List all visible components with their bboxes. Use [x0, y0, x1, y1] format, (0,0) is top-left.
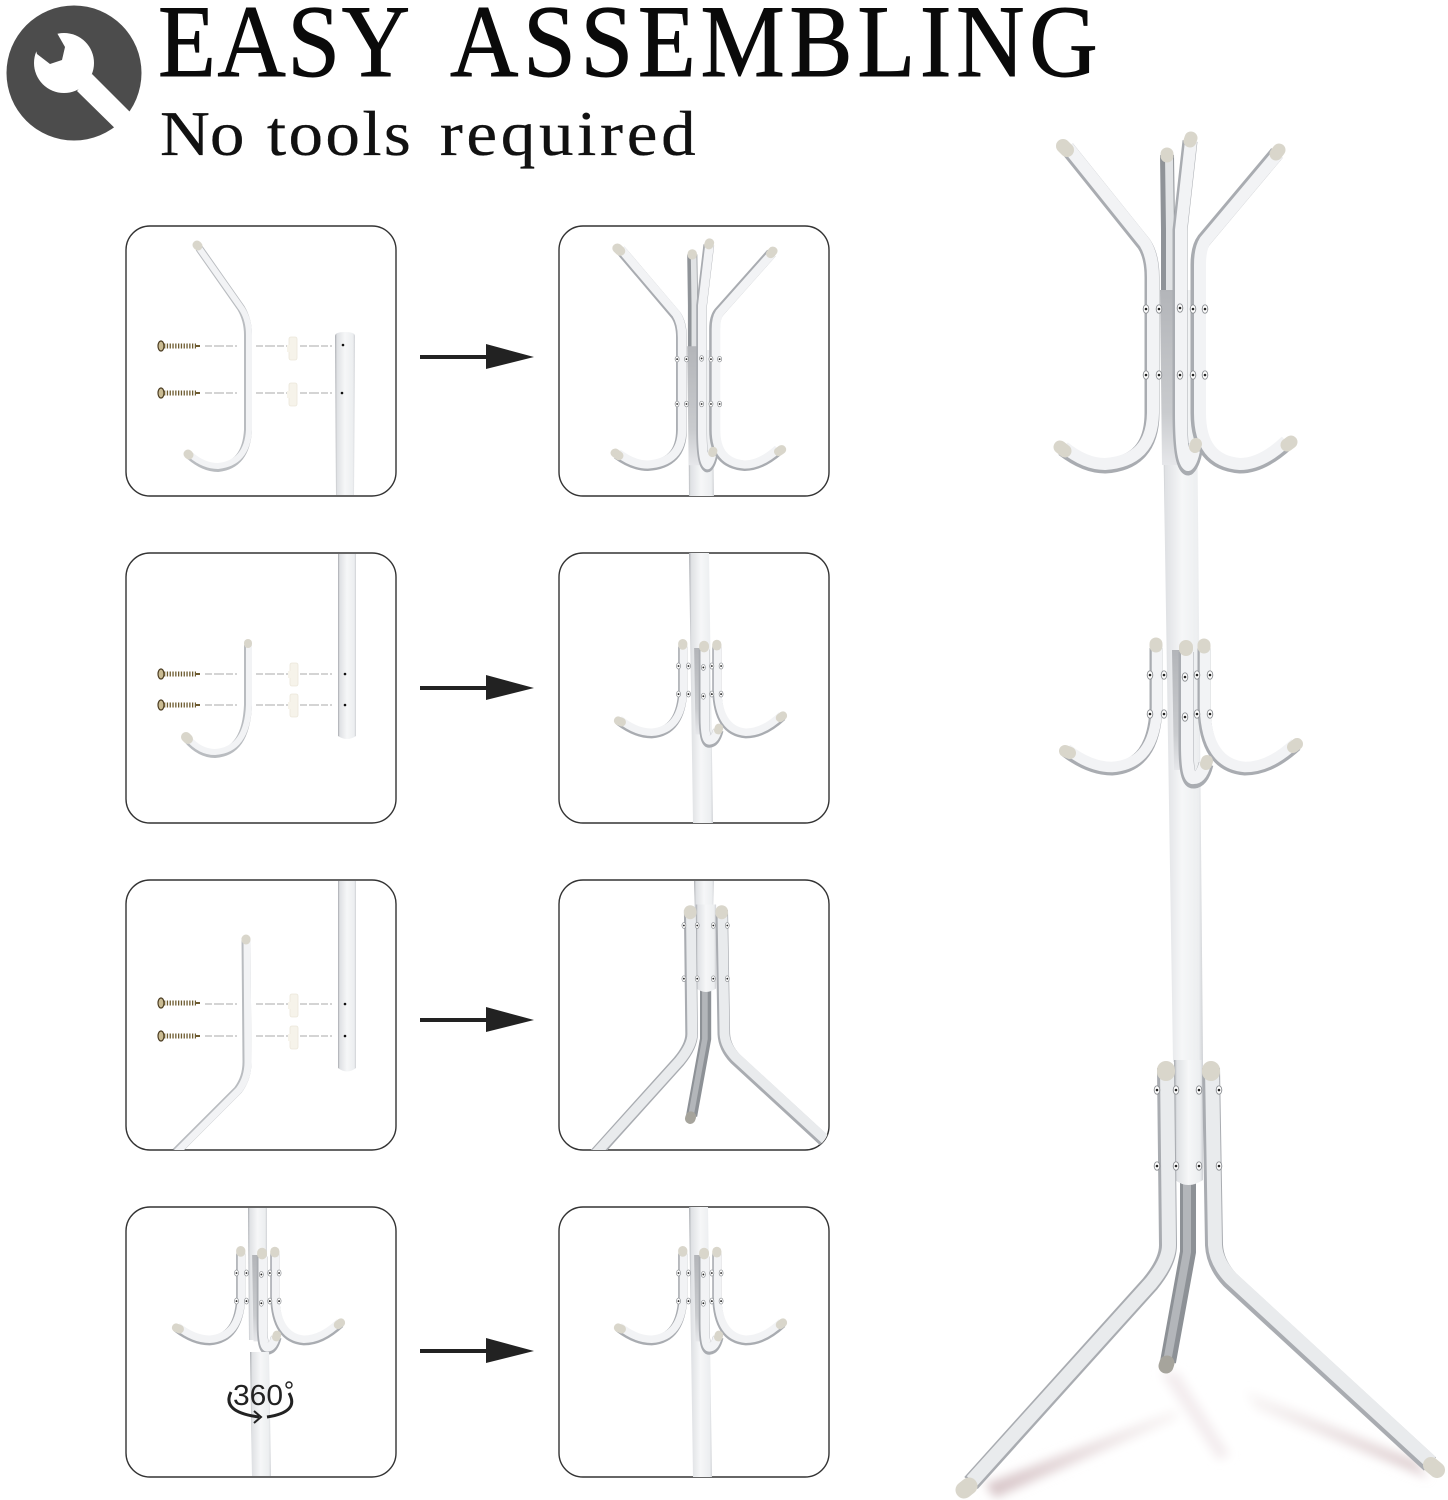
top hooks	[1060, 138, 1291, 468]
arrow	[420, 344, 534, 369]
middle hooks	[1065, 644, 1297, 781]
subtitle: tools	[267, 99, 413, 169]
panel: step 1 parts	[126, 226, 396, 496]
panel: step 1 assembled top hooks	[559, 226, 829, 496]
screws	[158, 341, 200, 398]
panel: step 4 rotate pole	[126, 1207, 396, 1477]
360 rotation mark	[229, 1380, 292, 1423]
floor shadows	[985, 1372, 1428, 1498]
spacers	[288, 994, 298, 1049]
screws	[158, 669, 200, 710]
subtitle: required	[440, 99, 699, 169]
coat stand product photo	[964, 138, 1437, 1490]
panel: step 4 assembled	[559, 1207, 829, 1477]
hook cluster	[176, 1251, 341, 1349]
subtitle: No	[160, 99, 244, 169]
screws	[158, 998, 200, 1041]
arrow	[420, 675, 534, 700]
pole section	[335, 332, 355, 495]
leg part	[176, 938, 248, 1152]
pole section	[338, 881, 356, 1072]
lower pole	[250, 1352, 271, 1476]
upper pole	[248, 1208, 267, 1340]
arrow	[420, 1007, 534, 1032]
panel: step 3 parts	[126, 880, 396, 1152]
spacers	[288, 663, 298, 717]
hook part	[188, 245, 249, 468]
pole section	[338, 554, 356, 739]
panel: step 2 assembled middle hooks	[559, 553, 829, 823]
spacers	[287, 337, 297, 406]
main pole	[1161, 290, 1203, 1062]
icon: wrench badge	[6, 6, 146, 144]
arrow	[420, 1338, 534, 1363]
hook part	[186, 643, 249, 754]
panel: step 3 assembled base	[558, 879, 830, 1151]
tripod base	[964, 1060, 1437, 1490]
title	[158, 0, 1098, 99]
panel: step 2 parts	[126, 553, 396, 823]
360 rotation mark: 360	[233, 1380, 283, 1412]
